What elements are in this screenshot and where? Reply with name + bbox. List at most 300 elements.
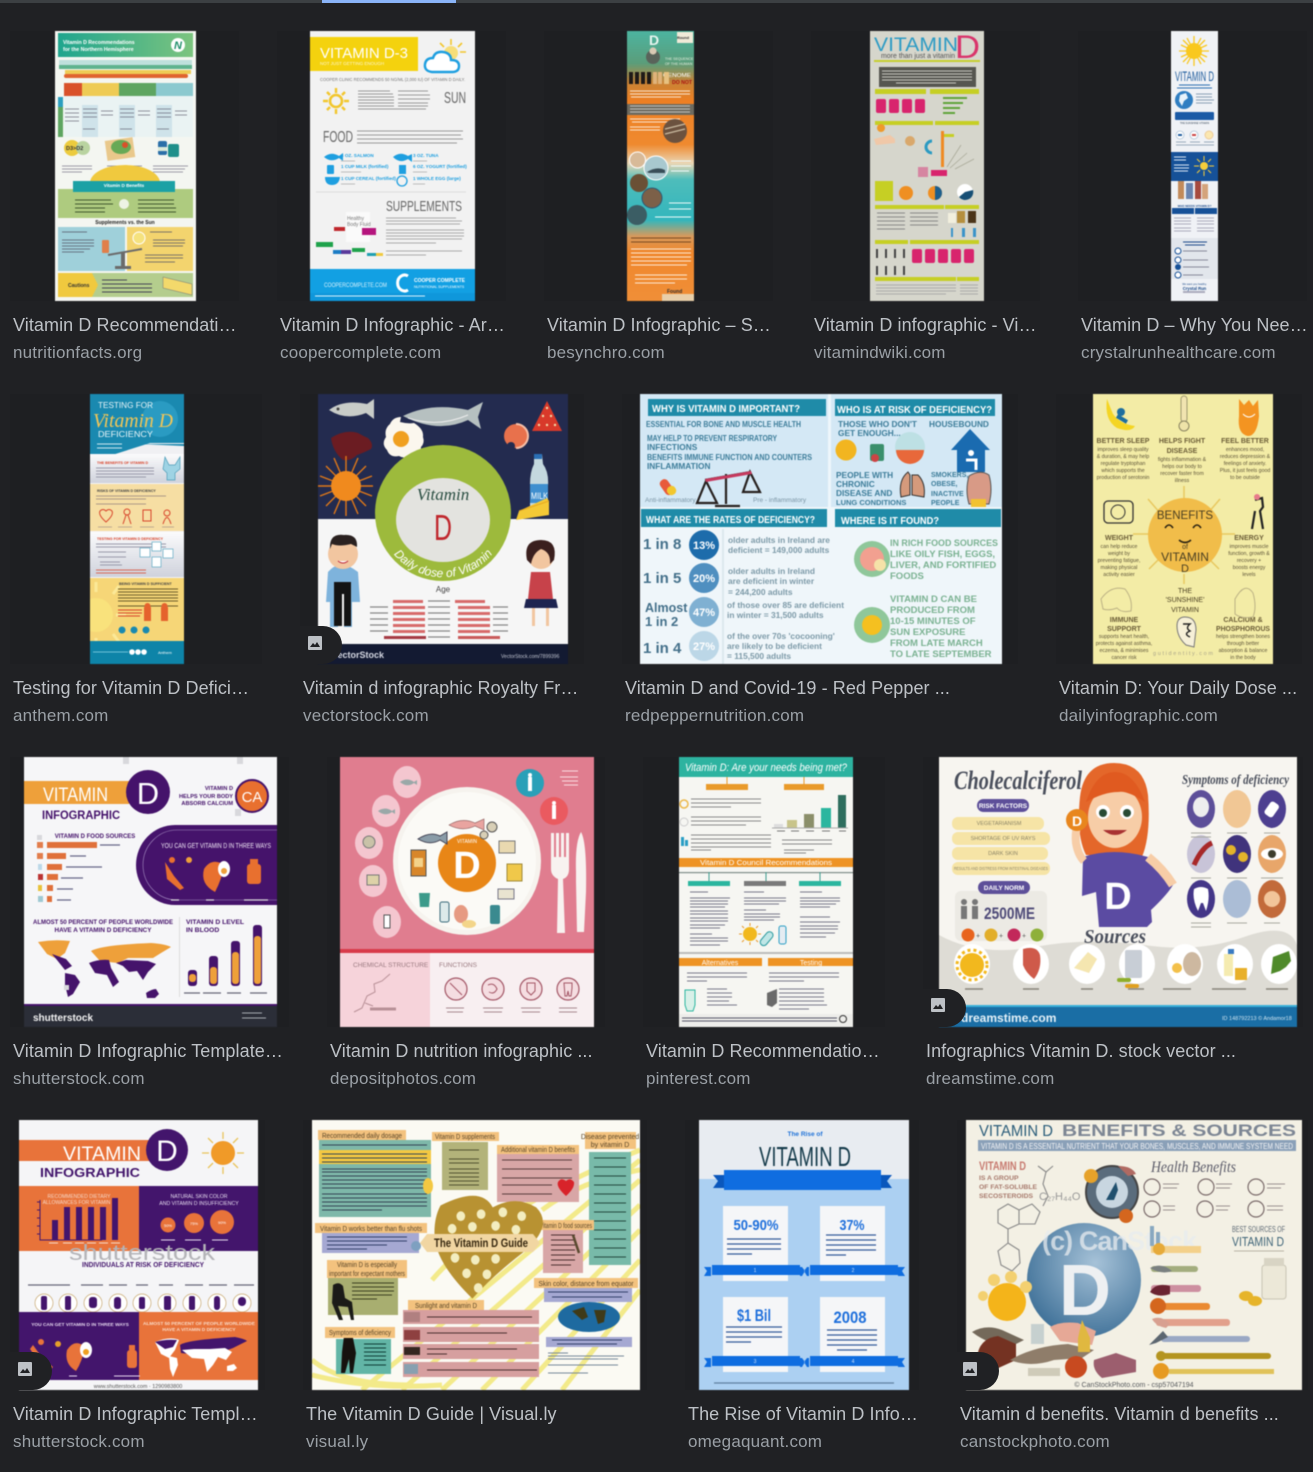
thumbnail: Vitamin D and Covid-19: older adults in Ireland	[728, 566, 815, 576]
thumbnail: Vitamin D infographic template: ABSORB CALCIUM	[181, 801, 233, 807]
thumbnail: Cholecalciferol infographic: dreamstime.com	[961, 1011, 1056, 1025]
thumbnail: Vitamin D-3: Healthy	[347, 216, 364, 222]
thumbnail: Vitamin D infographic template: IN BLOOD	[186, 927, 219, 934]
thumbnail: Vitamin D infographic orange purple: INFOGRAPHIC	[40, 1165, 141, 1180]
thumbnail: Cholecalciferol infographic: VEGETARIANISM	[977, 821, 1022, 827]
thumbnail: Testing for Vitamin D deficiency: RISKS OF VITAMIN D DEFICIENCY	[97, 489, 156, 493]
source: dailyinfographic.com	[1059, 706, 1218, 725]
thumbnail: Vitamin D benefits and sources: OF FAT-SOLUBLE	[979, 1184, 1037, 1191]
title: Infographics Vitamin D. stock vector ...	[926, 1041, 1236, 1061]
title: The Rise of Vitamin D Info…	[688, 1404, 918, 1424]
thumbnail: Vitamin D and Covid-19: INFLAMMATION	[647, 461, 710, 471]
thumbnail: Benefits of Vitamin D: improves sleep quality	[1097, 447, 1149, 453]
thumbnail: Vitamin D infographic orange purple	[18, 1119, 259, 1391]
thumbnail: Benefits of Vitamin D: 'SUNSHINE'	[1166, 597, 1204, 604]
thumbnail: Benefits of Vitamin D: function, growth &	[1228, 551, 1270, 557]
thumbnail: The Rise of Vitamin D: The Rise of	[787, 1131, 823, 1138]
thumbnail: Benefits of Vitamin D: recovery +	[1237, 558, 1261, 564]
thumbnail: The Vitamin D Guide: Vitamin D works better than flu shots	[320, 1226, 422, 1233]
source: visual.ly	[306, 1432, 368, 1451]
thumbnail: Testing for Vitamin D deficiency: TESTING FOR	[98, 400, 153, 410]
icon: image type badge	[951, 1352, 999, 1390]
thumbnail: Vitamin D and Covid-19: THOSE WHO DON'T	[838, 419, 917, 429]
thumbnail: Vitamin D and Covid-19: LIKE OILY FISH, EGGS,	[890, 549, 995, 560]
thumbnail: Vitamin D infographic orange purple: 90%	[218, 1220, 226, 1225]
thumbnail: Vitamin D infographic orange purple: ALLOWANCES FOR VITAMIN D	[43, 1200, 116, 1206]
thumbnail: Cholecalciferol infographic: +	[999, 933, 1003, 940]
thumbnail: Vitamin D and Covid-19: 1 in 5	[643, 570, 681, 587]
thumbnail: Benefits of Vitamin D: PHOSPHOROUS	[1216, 626, 1270, 633]
thumbnail: Cholecalciferol infographic: 2500ME	[984, 904, 1035, 923]
title: Vitamin D Recommendati…	[13, 315, 237, 335]
thumbnail: Cholecalciferol infographic: DARK SKIN	[988, 851, 1018, 857]
thumbnail: Vitamin D recommendations: Vitamin D Recommendations	[63, 40, 135, 46]
thumbnail: Vitamin D recommendations: D3>D2	[66, 146, 83, 152]
thumbnail: Vitamin D Are your needs being met: Testing	[800, 960, 822, 967]
thumbnail: Vitamin D benefits and sources: Health Benefits	[1150, 1159, 1236, 1176]
thumbnail: Vitamin D and Covid-19: 13%	[693, 540, 715, 552]
card: shutterstock template	[13, 756, 283, 1088]
thumbnail: Vitamin D and Covid-19: 20%	[693, 573, 715, 585]
source: omegaquant.com	[688, 1432, 822, 1451]
thumbnail: Vitamin D and Covid-19: 27%	[693, 641, 715, 653]
thumbnail: Vitamin D-3: 1 CUP CEREAL (fortified)	[341, 176, 396, 181]
thumbnail: Cholecalciferol infographic: +	[976, 933, 980, 940]
thumbnail: Benefits of Vitamin D: production of serotonin	[1097, 475, 1149, 481]
thumbnail: Cholecalciferol infographic	[938, 756, 1298, 1028]
thumbnail: Vitamin D benefits and sources: IS A GROUP	[979, 1175, 1019, 1182]
card: dailyinfographic	[1059, 393, 1297, 725]
thumbnail: Daily dose of Vitamin D: Daily dose of Vitamin	[394, 550, 492, 578]
thumbnail: Daily dose of Vitamin D: VectorStock.com/7899396	[501, 654, 560, 660]
thumbnail: Vitamin D infographic orange purple: 75%	[190, 1221, 198, 1226]
thumbnail: Vitamin D-3: COOPER COMPLETE	[414, 278, 465, 284]
thumbnail: Vitamin D infographic template: VITAMIN	[43, 785, 108, 806]
thumbnail: Vitamin D why you need it: We want you healthy.	[1182, 282, 1207, 286]
card: besynchro	[547, 30, 771, 362]
thumbnail: Vitamin D nutrition infographic: CHEMICAL STRUCTURE	[353, 962, 429, 969]
thumbnail: The Vitamin D Guide: Sunlight and vitamin D	[415, 1303, 477, 1310]
thumbnail: Vitamin D and Covid-19: VITAMIN D CAN BE	[890, 594, 977, 605]
thumbnail: The Rise of Vitamin D: 2008	[834, 1308, 866, 1327]
thumbnail: tall orange and teal infographic: D	[649, 32, 659, 48]
thumbnail: Vitamin D recommendations: Supplements vs. the Sun	[95, 220, 155, 226]
thumbnail: Benefits of Vitamin D: recover faster from	[1160, 471, 1204, 477]
thumbnail: Cholecalciferol infographic: ID 148792213 © Andamor18	[1222, 1015, 1292, 1022]
title: Vitamin D – Why You Nee…	[1081, 315, 1308, 335]
thumbnail: Vitamin D more than just a vitamin	[869, 30, 985, 302]
thumbnail: Benefits of Vitamin D: THE	[1178, 588, 1192, 595]
thumbnail: Vitamin D benefits and sources: C₂₇H₄₄O	[1039, 1191, 1081, 1203]
thumbnail: Vitamin D more than just a vitamin: more than just a vitamin	[881, 53, 955, 60]
thumbnail: Vitamin D and Covid-19: FROM LATE MARCH	[890, 638, 983, 649]
thumbnail: Benefits of Vitamin D: through better	[1227, 641, 1259, 647]
thumbnail: Vitamin D infographic orange purple: D	[156, 1135, 178, 1168]
thumbnail: Vitamin D and Covid-19: TO LATE SEPTEMBER	[890, 649, 992, 660]
thumbnail: Benefits of Vitamin D: illness	[1175, 478, 1190, 484]
thumbnail: Vitamin D nutrition infographic: D	[453, 845, 481, 887]
thumbnail: Vitamin D benefits and sources: SECOSTEROIDS	[979, 1193, 1033, 1200]
thumbnail: Cholecalciferol infographic: +	[1022, 933, 1026, 940]
thumbnail: Vitamin D and Covid-19: in winter = 31,500 adults	[727, 610, 824, 620]
thumbnail: Vitamin D infographic orange purple: YOU CAN GET VITAMIN D IN THREE WAYS	[31, 1322, 130, 1328]
thumbnail: Vitamin D benefits and sources: VITAMIN D	[979, 1123, 1053, 1140]
thumbnail: Vitamin D recommendations: Vitamin D Benefits	[104, 183, 145, 188]
thumbnail: Vitamin D benefits and sources: D	[1059, 1251, 1111, 1331]
title: Testing for Vitamin D Defici…	[13, 678, 249, 698]
thumbnail: The Vitamin D Guide: Vitamin D supplements	[435, 1134, 495, 1141]
card: coopercomplete	[280, 30, 505, 362]
source: coopercomplete.com	[280, 343, 441, 362]
thumbnail: Benefits of Vitamin D: BETTER SLEEP	[1097, 438, 1150, 445]
thumbnail: Benefits of Vitamin D: D	[1181, 563, 1189, 575]
thumbnail: Vitamin D and Covid-19: SMOKERS,	[931, 472, 968, 479]
thumbnail: Vitamin D benefits and sources: (c) CanStock	[1042, 1226, 1198, 1256]
thumbnail: Vitamin D Are your needs being met: Vitamin D Council Recommendations	[700, 860, 833, 867]
thumbnail: tall orange and teal infographic: Round	[677, 36, 690, 40]
thumbnail: Benefits of Vitamin D: eczema, & minimises	[1099, 648, 1149, 654]
thumbnail: Vitamin D benefits and sources: BENEFITS & SOURCES	[1062, 1121, 1296, 1140]
thumbnail: The Vitamin D Guide: Skin color, distance from equator	[538, 1281, 634, 1288]
source: depositphotos.com	[330, 1069, 476, 1088]
thumbnail: Testing for Vitamin D deficiency: Anthem	[158, 650, 172, 655]
thumbnail: Cholecalciferol infographic: Sources	[1084, 926, 1146, 948]
source: shutterstock.com	[13, 1432, 145, 1451]
card: visually	[306, 1119, 641, 1451]
thumbnail: Benefits of Vitamin D: VITAMIN	[1161, 550, 1209, 564]
thumbnail: Testing for Vitamin D deficiency	[89, 393, 185, 665]
thumbnail: Vitamin D infographic template: D	[137, 776, 159, 811]
thumbnail: Vitamin D and Covid-19: 47%	[693, 607, 715, 619]
thumbnail: Benefits of Vitamin D: can help reduce	[1101, 544, 1138, 550]
thumbnail: Benefits of Vitamin D: fights inflammation &	[1158, 457, 1207, 463]
thumbnail: The Vitamin D Guide: Additional vitamin D benefits	[501, 1147, 575, 1154]
thumbnail: Vitamin D nutrition infographic: VITAMIN	[457, 839, 477, 845]
thumbnail: Vitamin D and Covid-19: WHY IS VITAMIN D IMPORTANT?	[652, 403, 800, 415]
thumbnail: The Vitamin D Guide: Disease prevented	[581, 1134, 639, 1141]
thumbnail: Vitamin D infographic orange purple: NATURAL SKIN COLOR	[170, 1194, 228, 1200]
source: nutritionfacts.org	[13, 343, 142, 362]
thumbnail: Vitamin D infographic orange purple: ALMOST 50 PERCENT OF PEOPLE WORLDWIDE	[143, 1321, 256, 1327]
thumbnail: Testing for Vitamin D deficiency: TESTING FOR VITAMIN D DEFICIENCY	[97, 537, 164, 541]
icon: image type badge	[0, 1352, 52, 1390]
thumbnail: Vitamin D infographic template: VITAMIN D FOOD SOURCES	[55, 834, 135, 840]
thumbnail: Vitamin D and Covid-19: LUNG CONDITIONS	[836, 498, 906, 507]
thumbnail: The Rise of Vitamin D: 1	[754, 1268, 757, 1274]
thumbnail: The Rise of Vitamin D: 50-90%	[734, 1217, 778, 1234]
thumbnail: Vitamin D infographic orange purple: shutterstock	[69, 1240, 216, 1265]
thumbnail: Vitamin D and Covid-19: = 115,500 adults	[727, 651, 791, 661]
thumbnail: Vitamin D-3: 3 OZ. SALMON	[341, 153, 374, 158]
thumbnail: Cholecalciferol infographic: Cholecalciferol	[954, 766, 1083, 795]
thumbnail: Vitamin D and Covid-19: Pre - inflammatory	[753, 497, 807, 504]
thumbnail: Vitamin D and Covid-19: INACTIVE	[931, 491, 964, 498]
thumbnail: Vitamin D-3: Body Fluid	[347, 222, 371, 228]
thumbnail: Benefits of Vitamin D: IMMUNE	[1110, 617, 1139, 624]
thumbnail: Vitamin D and Covid-19: WHAT ARE THE RATES OF DEFICIENCY?	[646, 514, 815, 526]
thumbnail: The Vitamin D Guide: Vitamin D is especially	[337, 1262, 397, 1269]
title: Vitamin D Infographic - Ar…	[280, 315, 505, 335]
thumbnail: Vitamin D and Covid-19: BENEFITS IMMUNE FUNCTION AND COUNTERS	[647, 452, 812, 462]
thumbnail: Benefits of Vitamin D: preventing fatigue,	[1098, 558, 1140, 564]
thumbnail: Vitamin D Are your needs being met	[678, 756, 854, 1028]
thumbnail: Vitamin D infographic orange purple: 50%	[164, 1223, 172, 1228]
thumbnail: Benefits of Vitamin D: which supports the	[1101, 468, 1145, 474]
thumbnail: Cholecalciferol infographic: SHORTAGE OF UV RAYS	[971, 836, 1036, 842]
thumbnail: Vitamin D infographic template: VITAMIN D LEVEL	[186, 919, 244, 926]
source: besynchro.com	[547, 343, 665, 362]
thumbnail: Benefits of Vitamin D: boosts energy	[1233, 565, 1266, 571]
thumbnail: Vitamin D infographic orange purple: INDIVIDUALS AT RISK OF DEFICIENCY	[82, 1262, 204, 1269]
source: vectorstock.com	[303, 706, 429, 725]
thumbnail: Benefits of Vitamin D: of	[1182, 544, 1188, 551]
thumbnail: Vitamin D Are your needs being met: Alternatives	[702, 960, 739, 967]
thumbnail: Benefits of Vitamin D: helps our body to	[1162, 464, 1202, 470]
thumbnail: Vitamin D and Covid-19: LIVER, AND FORTIFIED	[890, 560, 996, 571]
thumbnail: Benefits of Vitamin D: improves muscle	[1230, 544, 1269, 550]
thumbnail: Benefits of Vitamin D: enhances mood,	[1226, 447, 1264, 453]
thumbnail: Benefits of Vitamin D: gutidentity.com	[1153, 651, 1213, 657]
icon: image type badge	[917, 989, 966, 1027]
thumbnail: Vitamin D-3: NUTRITIONAL SUPPLEMENTS	[414, 285, 465, 289]
thumbnail: Vitamin D nutrition infographic	[339, 756, 595, 1028]
source: redpeppernutrition.com	[625, 706, 804, 725]
thumbnail: Benefits of Vitamin D: levels	[1242, 572, 1256, 578]
source: vitamindwiki.com	[814, 343, 946, 362]
thumbnail: Vitamin D and Covid-19: GET ENOUGH...	[838, 428, 901, 438]
thumbnail: Benefits of Vitamin D: reduces depression &	[1220, 454, 1271, 460]
thumbnail: Vitamin D and Covid-19: 1 in 8	[643, 536, 681, 553]
title: Vitamin D nutrition infographic ...	[330, 1041, 593, 1061]
source: pinterest.com	[646, 1069, 751, 1088]
thumbnail: Benefits of Vitamin D: feelings of anxiety.	[1224, 461, 1266, 467]
thumbnail: Vitamin D and Covid-19: 10-15 MINUTES OF	[890, 616, 976, 627]
thumbnail: Testing for Vitamin D deficiency: DEFICIENCY	[98, 429, 153, 439]
thumbnail: Vitamin D why you need it: THE SUNSHINE VITAMIN	[1180, 122, 1209, 125]
thumbnail: Vitamin D and Covid-19: PRODUCED FROM	[890, 605, 975, 616]
thumbnail: Daily dose of Vitamin D: VectorStock	[332, 650, 385, 660]
thumbnail: Vitamin D and Covid-19: ESSENTIAL FOR BONE AND MUSCLE HEALTH	[646, 419, 801, 429]
thumbnail: The Rise of Vitamin D	[698, 1119, 910, 1391]
card: redpepper	[625, 393, 1003, 725]
thumbnail: Vitamin D-3	[309, 30, 476, 302]
thumbnail: Vitamin D and Covid-19: are deficient in winter	[728, 576, 815, 586]
thumbnail: Vitamin D infographic template: HAVE A VITAMIN D DEFICIENCY	[54, 927, 152, 934]
thumbnail: The Vitamin D Guide: by vitamin D	[591, 1142, 629, 1149]
thumbnail: Vitamin D and Covid-19: DISEASE AND	[836, 488, 892, 498]
thumbnail: Vitamin D-3: VITAMIN D-3	[320, 45, 408, 62]
source: shutterstock.com	[13, 1069, 145, 1088]
thumbnail: tall orange and teal infographic: Found	[667, 289, 682, 295]
card: vitamindwiki	[814, 30, 1037, 362]
thumbnail: Vitamin D and Covid-19: 1 in 2	[645, 614, 678, 629]
thumbnail: Vitamin D recommendations: for the Northern Hemisphere	[63, 47, 134, 53]
source: anthem.com	[13, 706, 109, 725]
title: Vitamin D Infographic – S…	[547, 315, 771, 335]
card: anthem	[13, 393, 249, 725]
thumbnail: Benefits of Vitamin D: Plus, it just feels good	[1220, 468, 1270, 474]
title: The Vitamin D Guide | Visual.ly	[306, 1404, 557, 1424]
thumbnail: Daily dose of Vitamin D	[317, 394, 569, 664]
thumbnail: Benefits of Vitamin D: DISEASE	[1167, 448, 1198, 455]
thumbnail: tall orange and teal infographic: THE SEQUENCE	[665, 57, 694, 61]
thumbnail: Cholecalciferol infographic: RISK FACTORS	[979, 803, 1028, 810]
thumbnail: Vitamin D and Covid-19: of those over 85 are deficient	[727, 600, 844, 610]
thumbnail: The Rise of Vitamin D: 37%	[840, 1217, 864, 1234]
thumbnail: The Rise of Vitamin D: 4	[852, 1359, 855, 1365]
source: dreamstime.com	[926, 1069, 1054, 1088]
thumbnail: Testing for Vitamin D deficiency: THE BENEFITS OF VITAMIN D	[97, 461, 148, 465]
thumbnail: Testing for Vitamin D deficiency: BEING VITAMIN D SUFFICIENT	[119, 582, 172, 586]
thumbnail: Vitamin D infographic template: HELPS YOUR BODY	[179, 794, 233, 800]
thumbnail: Vitamin D infographic orange purple: RECOMMENDED DIETARY	[48, 1194, 111, 1200]
thumbnail: Vitamin D and Covid-19: HOUSEBOUND	[929, 419, 989, 429]
thumbnail: Benefits of Vitamin D: absorption & balance	[1219, 648, 1267, 654]
thumbnail: Benefits of Vitamin D: HELPS FIGHT	[1159, 438, 1206, 445]
thumbnail: Vitamin D and Covid-19: deficient = 149,000 adults	[728, 545, 830, 555]
thumbnail: Cholecalciferol infographic: D	[1104, 876, 1132, 918]
thumbnail: Benefits of Vitamin D: regulate tryptophan	[1101, 461, 1145, 467]
title: Vitamin D: Your Daily Dose ...	[1059, 678, 1297, 698]
thumbnail: Vitamin D-3: 1 CUP MILK (fortified)	[341, 164, 389, 169]
thumbnail: tall orange and teal infographic: OF THE HUMAN	[665, 62, 693, 66]
thumbnail: Benefits of Vitamin D: CALCIUM &	[1223, 617, 1263, 624]
card: omegaquant	[688, 1119, 918, 1451]
thumbnail: Vitamin D and Covid-19: WHERE IS IT FOUND?	[841, 515, 939, 527]
thumbnail: Vitamin D why you need it	[1170, 30, 1219, 302]
thumbnail: Benefits of Vitamin D: cancer risk	[1111, 655, 1137, 661]
thumbnail: Vitamin D infographic template	[23, 756, 278, 1027]
icon: image type badge	[295, 626, 342, 664]
thumbnail: Vitamin D and Covid-19: = 244,200 adults	[728, 587, 793, 597]
thumbnail: Vitamin D and Covid-19: CHRONIC	[836, 479, 875, 489]
thumbnail: Benefits of Vitamin D: supports heart health,	[1099, 634, 1149, 640]
thumbnail: Daily dose of Vitamin D: MILK	[531, 491, 548, 501]
thumbnail: tall orange and teal infographic	[626, 30, 695, 302]
card: depositphotos	[330, 756, 595, 1088]
thumbnail: Vitamin D and Covid-19: MAY HELP TO PREVENT RESPIRATORY	[647, 433, 777, 443]
thumbnail: Benefits of Vitamin D: WEIGHT	[1105, 535, 1134, 542]
thumbnail: Benefits of Vitamin D: protects against asthma,	[1096, 641, 1152, 647]
title: Vitamin d infographic Royalty Fr…	[303, 678, 578, 698]
thumbnail: Vitamin D infographic template: VITAMIN D	[205, 786, 233, 792]
thumbnail: Vitamin D and Covid-19: PEOPLE WITH	[836, 470, 893, 480]
thumbnail: tall orange and teal infographic: DO NOT	[672, 80, 693, 86]
title: Vitamin D infographic - Vi…	[814, 315, 1037, 335]
thumbnail: Vitamin D-3: 6 OZ. YOGURT (fortified)	[413, 164, 467, 169]
thumbnail: Vitamin D benefits and sources	[965, 1119, 1303, 1391]
thumbnail: The Rise of Vitamin D: $1 Bil	[737, 1306, 771, 1325]
thumbnail: Testing for Vitamin D deficiency: Vitamin D	[93, 410, 174, 432]
thumbnail: Vitamin D why you need it: Crystal Run	[1183, 286, 1207, 291]
thumbnail: Vitamin D infographic template: ALMOST 50 PERCENT OF PEOPLE WORLDWIDE	[33, 919, 174, 926]
thumbnail: Vitamin D and Covid-19: of the over 70s 'cocooning'	[727, 631, 835, 641]
thumbnail: Benefits of Vitamin D: FEEL BETTER	[1221, 438, 1269, 445]
thumbnail: Benefits of Vitamin D	[1092, 393, 1274, 665]
thumbnail: Vitamin D and Covid-19: IN RICH FOOD SOURCES	[890, 538, 998, 549]
title: Vitamin D and Covid-19 - Red Pepper ...	[625, 678, 950, 698]
thumbnail: Vitamin D-3: 1 WHOLE EGG (large)	[413, 176, 461, 181]
title: Vitamin D Infographic Templ…	[13, 1404, 258, 1424]
thumbnail: The Rise of Vitamin D: VITAMIN D	[759, 1141, 851, 1172]
tab underline bar	[0, 0, 1313, 3]
thumbnail: Vitamin D infographic template: INFOGRAPHIC	[42, 808, 120, 822]
thumbnail: Vitamin D recommendations: Cautions	[68, 283, 90, 289]
thumbnail: Benefits of Vitamin D: VITAMIN	[1171, 607, 1199, 614]
card: crystalrun	[1081, 30, 1308, 362]
thumbnail: Vitamin D-3: FOOD	[323, 129, 353, 146]
card: nutritionfacts	[13, 30, 237, 362]
thumbnail: Vitamin D and Covid-19: INFECTIONS	[647, 442, 698, 452]
source: crystalrunhealthcare.com	[1081, 343, 1276, 362]
thumbnail: The Vitamin D Guide: Recommended daily dosage	[322, 1133, 402, 1140]
title: Vitamin D Infographic Template…	[13, 1041, 283, 1061]
thumbnail: Vitamin D nutrition infographic: FUNCTIONS	[439, 962, 478, 969]
title: Vitamin d benefits. Vitamin d benefits ...	[960, 1404, 1279, 1424]
thumbnail: Vitamin D and Covid-19: Anti-inflammatory	[645, 497, 696, 504]
thumbnail: Vitamin D infographic template: CA	[242, 789, 262, 806]
thumbnail: Vitamin D infographic template: shutterstock	[33, 1013, 93, 1024]
thumbnail: Benefits of Vitamin D: activity easier	[1103, 572, 1135, 578]
thumbnail: Benefits of Vitamin D: making physical	[1101, 565, 1137, 571]
thumbnail: Daily dose of Vitamin D: D	[434, 507, 452, 548]
thumbnail: Vitamin D benefits and sources: © CanStockPhoto.com - csp57047194	[1074, 1381, 1194, 1389]
thumbnail: tall orange and teal infographic: GENOME	[663, 73, 691, 79]
card: pinterest	[646, 756, 880, 1088]
thumbnail: Benefits of Vitamin D: BENEFITS	[1157, 510, 1213, 522]
thumbnail: Vitamin D and Covid-19: PEOPLE	[931, 500, 960, 507]
thumbnail: Benefits of Vitamin D: to be outside	[1230, 475, 1260, 481]
thumbnail: Vitamin D infographic orange purple: HAVE A VITAMIN D DEFICIENCY	[162, 1327, 236, 1333]
thumbnail: Vitamin D and Covid-19: SUN EXPOSURE	[890, 627, 966, 638]
thumbnail: Vitamin D and Covid-19: 1 in 4	[643, 640, 682, 657]
thumbnail: Vitamin D and Covid-19: older adults in Ireland are	[728, 535, 830, 545]
thumbnail: Benefits of Vitamin D: weight by	[1108, 551, 1130, 557]
thumbnail: The Vitamin D Guide: The Vitamin D Guide	[434, 1236, 528, 1250]
thumbnail: Vitamin D recommendations	[54, 30, 197, 302]
thumbnail: Vitamin D and Covid-19: are likely to be deficient	[727, 641, 822, 651]
thumbnail: Vitamin D infographic orange purple: www.shutterstock.com · 1290983800	[93, 1384, 182, 1390]
thumbnail: Cholecalciferol infographic: RESULTS AND DISTRESS FROM INTESTINAL DISEASES	[954, 866, 1048, 872]
card: canstockphoto	[960, 1119, 1303, 1451]
card: dreamstime	[926, 756, 1298, 1088]
source: canstockphoto.com	[960, 1432, 1110, 1451]
thumbnail: Daily dose of Vitamin D: Vitamin	[417, 485, 469, 504]
thumbnail: Benefits of Vitamin D: ENERGY	[1234, 535, 1264, 542]
thumbnail: Cholecalciferol infographic: DAILY NORM	[984, 885, 1024, 892]
thumbnail: The Vitamin D Guide	[311, 1119, 641, 1391]
thumbnail: Vitamin D-3: COOPERCOMPLETE.COM	[324, 282, 387, 289]
thumbnail: The Vitamin D Guide: Symptoms of deficiency	[329, 1330, 391, 1337]
thumbnail: Vitamin D more than just a vitamin: VITAMIN	[874, 35, 958, 56]
thumbnail: Benefits of Vitamin D: & duration, & may help	[1097, 454, 1149, 460]
card: vectorstock	[303, 394, 578, 725]
thumbnail: Vitamin D and Covid-19: FOODS	[890, 571, 924, 582]
thumbnail: Vitamin D and Covid-19: OBESE,	[931, 481, 958, 488]
thumbnail: The Rise of Vitamin D: 3	[754, 1359, 757, 1365]
thumbnail: Benefits of Vitamin D: helps strengthen bones	[1216, 634, 1270, 640]
card: shutterstock second	[13, 1119, 259, 1451]
thumbnail: Daily dose of Vitamin D: Age	[436, 585, 451, 594]
thumbnail: The Vitamin D Guide: important for expectant mothers	[329, 1271, 405, 1278]
thumbnail: Vitamin D-3: NOT JUST GETTING ENOUGH	[320, 61, 384, 66]
thumbnail: Benefits of Vitamin D: SUPPORT	[1107, 626, 1142, 633]
thumbnail: Vitamin D infographic orange purple: VITAMIN	[63, 1144, 141, 1165]
thumbnail: Benefits of Vitamin D: in the body	[1230, 655, 1256, 661]
thumbnail: Vitamin D benefits and sources: VITAMIN D	[979, 1159, 1026, 1173]
thumbnail: Vitamin D benefits and sources: VITAMIN D	[1232, 1234, 1284, 1249]
thumbnail: The Vitamin D Guide: Vitamin D food sources	[540, 1223, 592, 1230]
